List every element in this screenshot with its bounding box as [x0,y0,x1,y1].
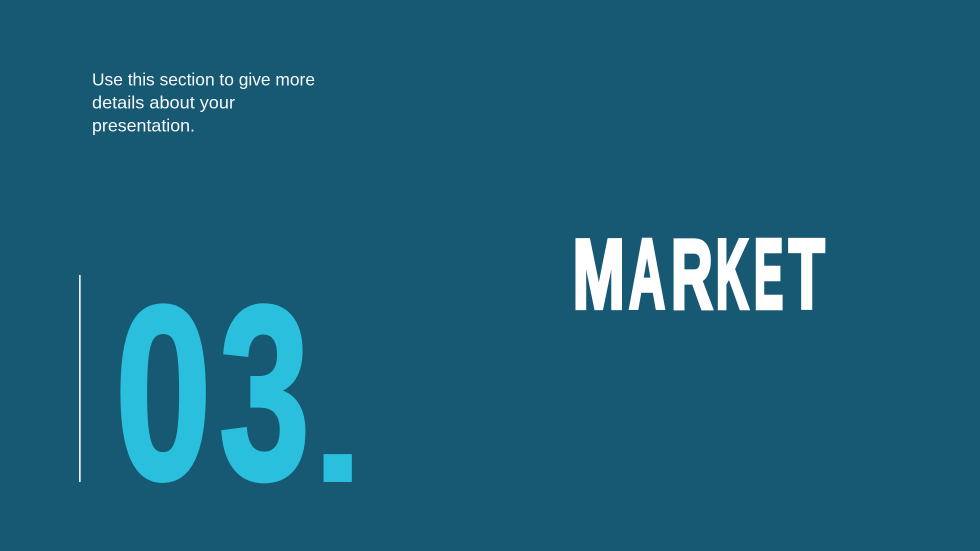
section title: M [573,221,625,329]
section number: 3 [219,254,310,532]
section number: 0 [115,255,212,532]
description text [92,70,315,136]
description text: Use this section to give more [92,70,315,90]
section number [115,254,366,532]
vertical divider line [79,275,81,482]
description text: presentation. [92,116,195,136]
section title: K [716,221,748,330]
section title: E [754,220,783,330]
section number: . [310,314,366,523]
section title: T [789,221,825,330]
description text: details about your [92,92,235,112]
section title [573,220,825,330]
section title: R [671,220,713,330]
section title: A [629,221,665,329]
